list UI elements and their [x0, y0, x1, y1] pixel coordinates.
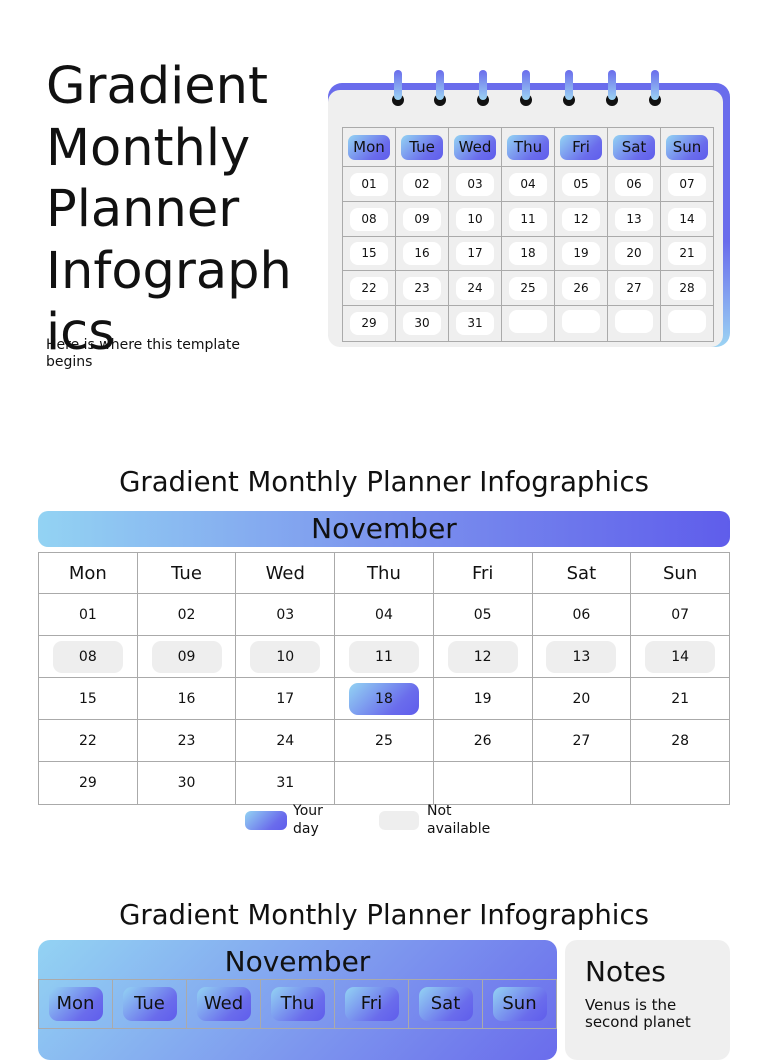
- spiral rings: [392, 70, 661, 106]
- mini calendar grid: 07: [679, 176, 695, 190]
- mini calendar grid: 10: [467, 212, 483, 226]
- subtitle: Here is where this template begins: [46, 337, 240, 370]
- title: [46, 57, 292, 362]
- mini calendar grid: 29: [361, 316, 377, 330]
- title: Planner: [46, 180, 239, 239]
- mini calendar grid: 20: [626, 246, 642, 260]
- mini calendar grid: 15: [361, 246, 377, 260]
- main calendar table: Fri: [472, 562, 493, 584]
- main calendar table: 12: [474, 648, 492, 664]
- month banner: [38, 511, 730, 547]
- mini calendar grid: 08: [361, 212, 377, 226]
- main calendar table: 24: [276, 732, 294, 748]
- main calendar table: 22: [79, 732, 97, 748]
- main calendar table: 03: [276, 606, 294, 622]
- main calendar table: 07: [671, 606, 689, 622]
- mini calendar grid: 26: [573, 280, 589, 294]
- main calendar table: 25: [375, 732, 393, 748]
- main calendar table: [38, 552, 730, 805]
- mini calendar grid: 05: [573, 176, 589, 190]
- main calendar table: 28: [671, 732, 689, 748]
- main calendar table: 10: [276, 648, 294, 664]
- month banner: November: [311, 512, 457, 545]
- main calendar table: 09: [178, 648, 195, 664]
- weekday row: Fri: [361, 993, 382, 1014]
- weekday row: Wed: [204, 993, 243, 1014]
- legend: not available: available: [427, 821, 490, 837]
- notes text: Venus is the second planet: [585, 996, 691, 1031]
- mini calendar grid: Tue: [409, 138, 435, 156]
- main calendar table: Mon: [69, 562, 107, 584]
- legend: your day: [245, 803, 323, 837]
- main calendar table: 26: [474, 732, 492, 748]
- main calendar table: Thu: [367, 562, 401, 584]
- main calendar table: 27: [572, 732, 590, 748]
- mini calendar grid: Sun: [673, 138, 701, 156]
- mini calendar grid: Mon: [353, 138, 385, 156]
- main calendar table: 01: [79, 606, 97, 622]
- mini calendar grid: 06: [626, 176, 642, 190]
- mini calendar grid: 31: [467, 316, 483, 330]
- title: Gradient: [46, 57, 268, 116]
- mini calendar grid: 04: [520, 176, 536, 190]
- main calendar table: 15: [79, 690, 97, 706]
- mini calendar grid: 17: [467, 246, 483, 260]
- weekday row: Mon: [57, 993, 94, 1014]
- main calendar table: 31: [276, 775, 294, 791]
- legend: your day: Your: [293, 803, 323, 819]
- mini calendar grid: 30: [414, 316, 430, 330]
- legend: your day: day: [293, 821, 319, 837]
- mini calendar grid: Fri: [572, 138, 590, 156]
- weekday row: Thu: [281, 993, 314, 1014]
- main calendar table: 29: [79, 775, 97, 791]
- main calendar table: 02: [178, 606, 195, 622]
- main calendar table: 05: [474, 606, 492, 622]
- title: Monthly: [46, 118, 250, 178]
- main calendar table: 06: [572, 606, 590, 622]
- main calendar table: 14: [671, 648, 689, 664]
- calendar card: [328, 83, 730, 347]
- mini calendar grid: [342, 127, 714, 342]
- main calendar table: 21: [671, 690, 689, 706]
- mini calendar grid: 14: [679, 212, 695, 226]
- mini calendar grid: 01: [361, 176, 377, 190]
- main calendar table: Wed: [266, 562, 305, 584]
- weekday row: Sat: [431, 993, 460, 1014]
- weekday row: Sun: [502, 993, 537, 1014]
- main calendar table: 20: [572, 690, 590, 706]
- title: Infograph: [46, 242, 292, 300]
- gradient calendar panel: [38, 940, 557, 1060]
- weekday row: [38, 979, 557, 1029]
- main calendar table: 19: [474, 690, 492, 706]
- mini calendar grid: 11: [520, 212, 536, 226]
- main calendar table: 13: [572, 648, 590, 664]
- main calendar table: 23: [178, 732, 195, 748]
- legend: not available: Not: [427, 803, 452, 819]
- main calendar table: 30: [178, 775, 195, 791]
- mini calendar grid: 13: [626, 212, 642, 226]
- mini calendar grid: 24: [467, 280, 483, 294]
- mini calendar grid: 27: [626, 280, 642, 294]
- legend: not available: [379, 803, 490, 837]
- mini calendar grid: 18: [520, 246, 536, 260]
- mini calendar grid: 09: [414, 212, 430, 226]
- mini calendar grid: 03: [467, 176, 483, 190]
- notes heading: Notes: [585, 955, 666, 988]
- mini calendar grid: 25: [520, 280, 536, 294]
- main calendar table: 04: [375, 606, 393, 622]
- section 2 heading: Gradient Monthly Planner Infographics: [119, 466, 649, 498]
- mini calendar grid: 12: [573, 212, 589, 226]
- title: ics: [46, 303, 115, 362]
- mini calendar grid: 02: [414, 176, 430, 190]
- mini calendar grid: Thu: [514, 138, 542, 156]
- mini calendar grid: 22: [361, 280, 377, 294]
- mini calendar grid: Wed: [459, 138, 491, 156]
- main calendar table: Tue: [171, 562, 202, 584]
- mini calendar grid: 16: [414, 246, 430, 260]
- calendar illustration: [328, 70, 730, 347]
- mini calendar grid: 28: [679, 280, 695, 294]
- main calendar table: 11: [375, 648, 393, 664]
- legend: [245, 803, 490, 837]
- month title: November: [225, 945, 370, 978]
- main calendar table: 17: [276, 690, 294, 706]
- main calendar table: 08: [79, 648, 97, 664]
- mini calendar grid: 23: [414, 280, 430, 294]
- main calendar table: 16: [178, 690, 195, 706]
- mini calendar grid: 21: [679, 246, 695, 260]
- notes panel: [565, 940, 730, 1060]
- main calendar table: 18: [375, 690, 393, 706]
- mini calendar grid: 19: [573, 246, 589, 260]
- main calendar table: Sun: [663, 562, 697, 584]
- mini calendar grid: Sat: [622, 138, 646, 156]
- main calendar table: Sat: [567, 562, 596, 584]
- weekday row: Tue: [134, 993, 165, 1014]
- section 3 heading: Gradient Monthly Planner Infographics: [119, 899, 649, 931]
